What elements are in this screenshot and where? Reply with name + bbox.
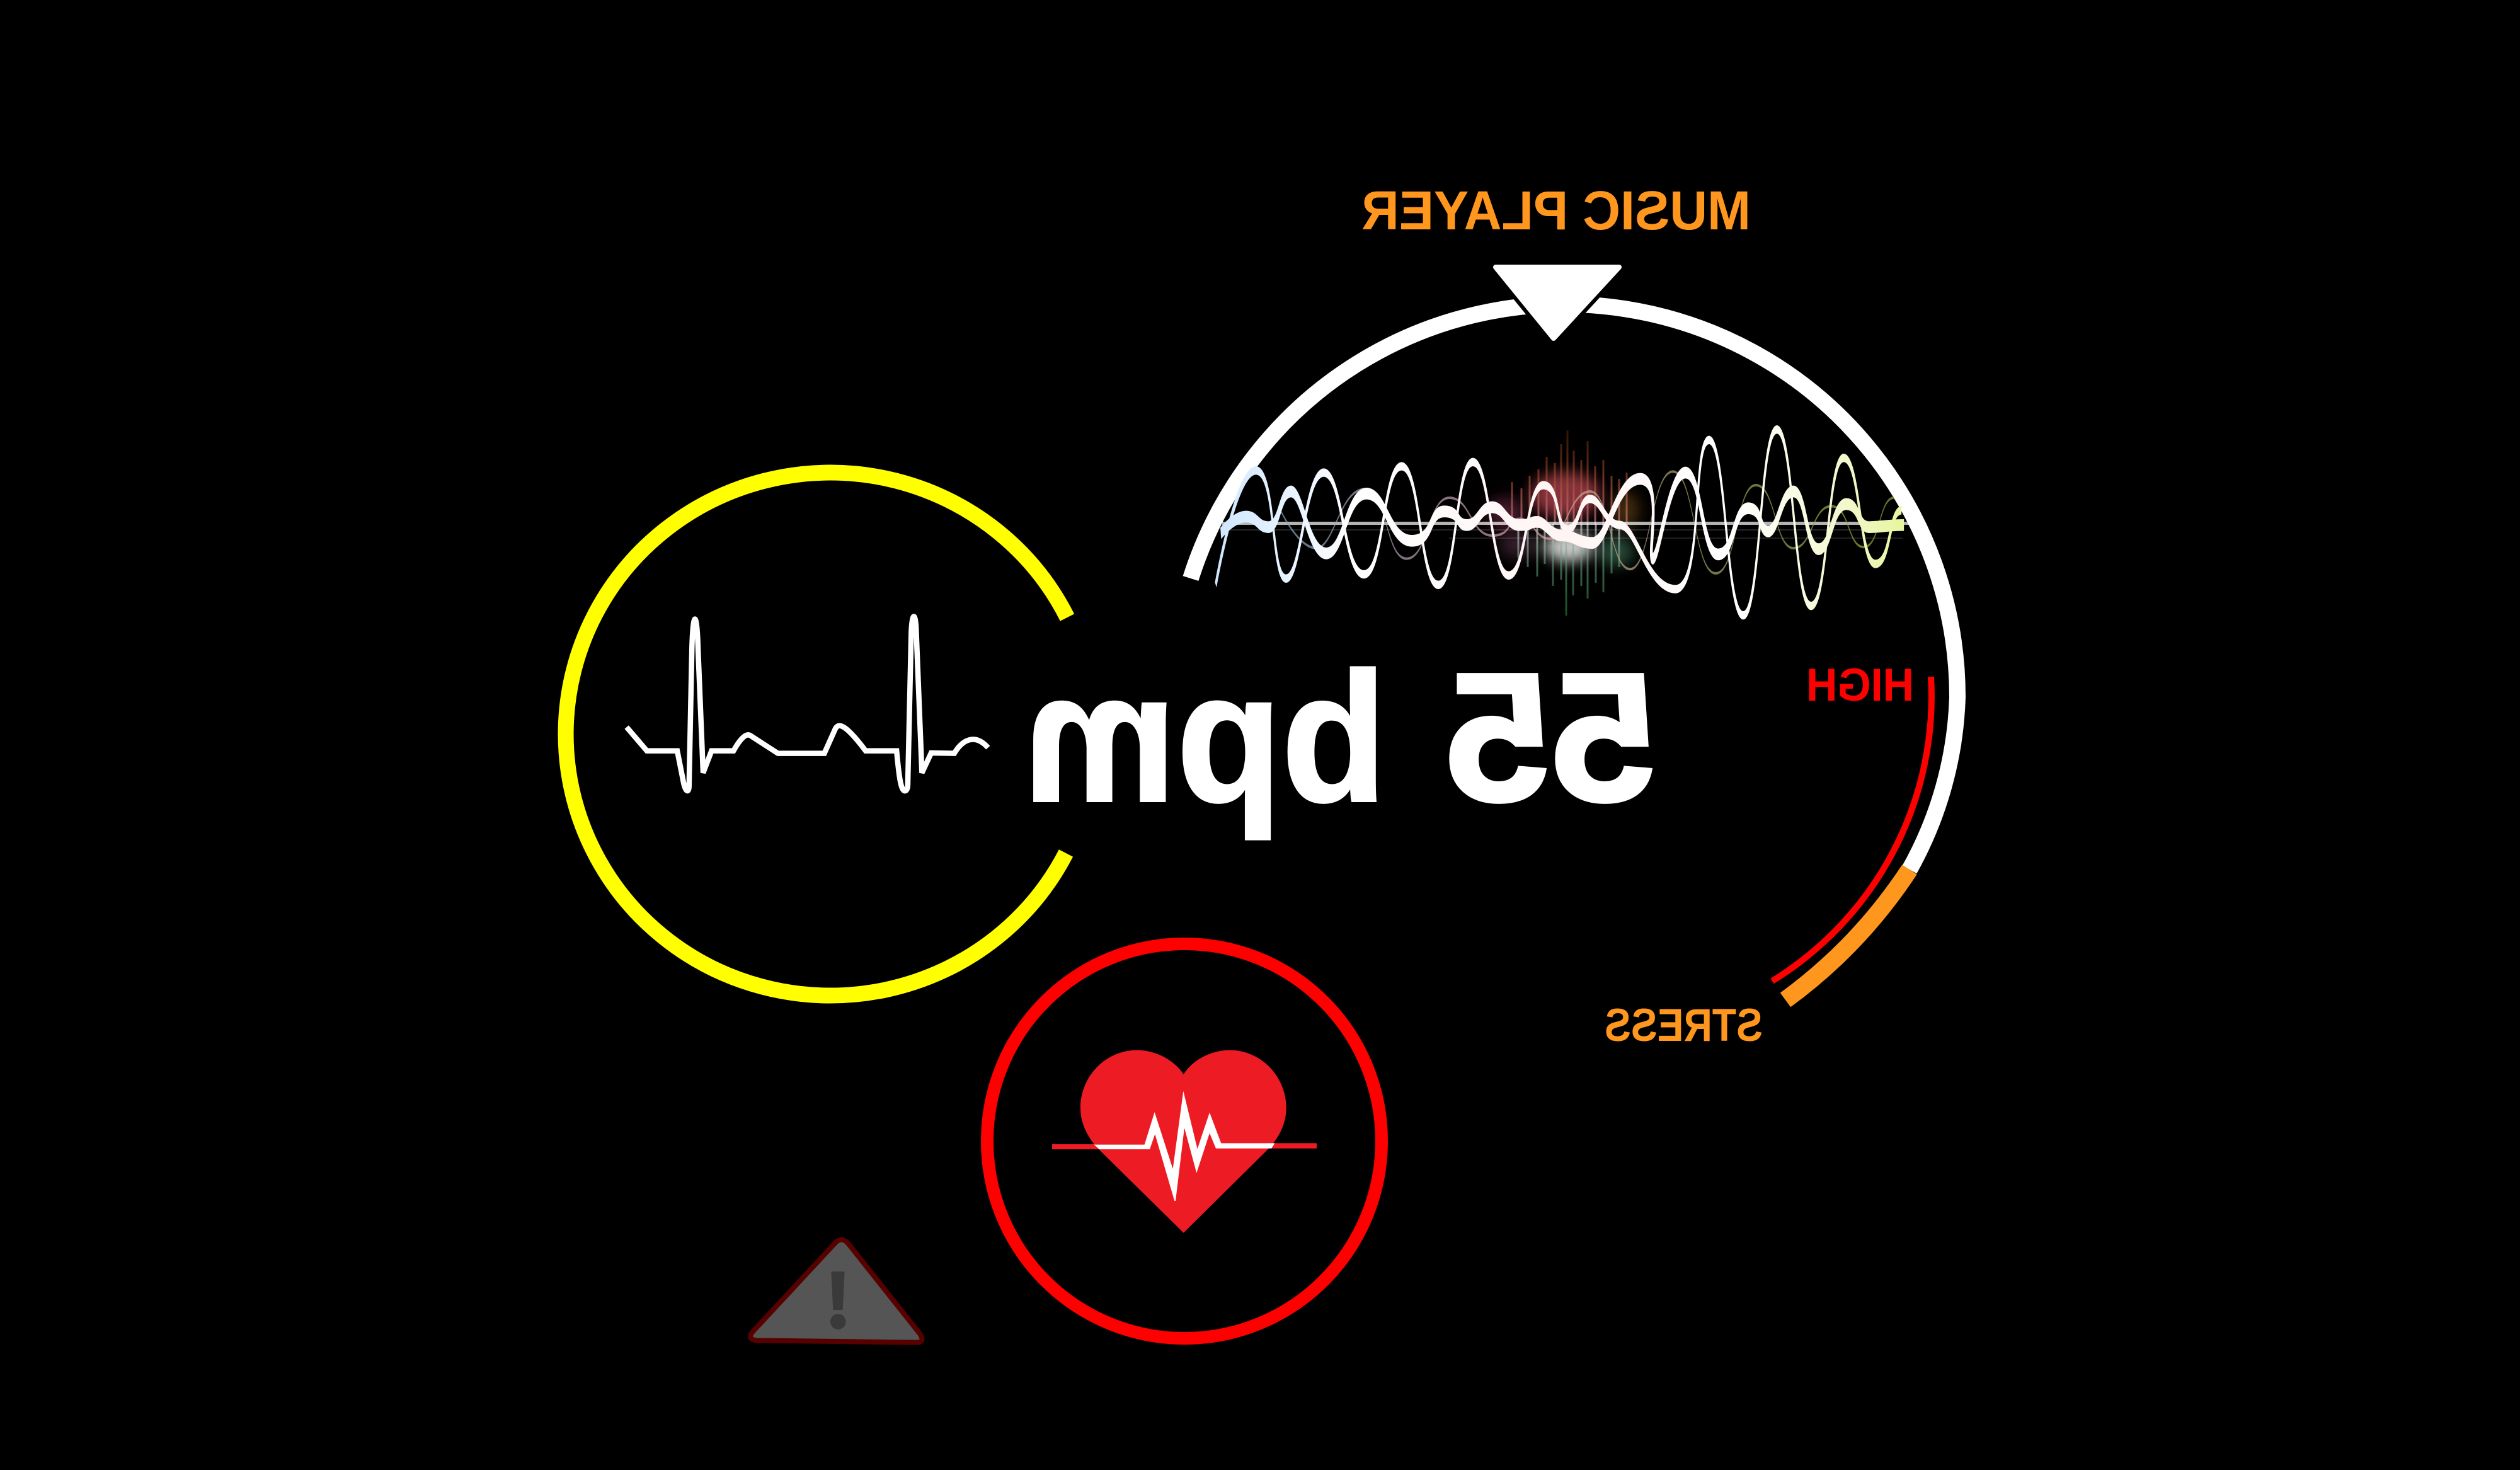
icon: ECG trace bbox=[627, 616, 988, 791]
center lines bbox=[1222, 522, 1909, 539]
big reading: 55 bpm: bpm bbox=[1024, 635, 1387, 841]
label: high: HIGH bbox=[1806, 660, 1914, 711]
spectrum glow bbox=[1487, 472, 1639, 566]
big reading: 55 bpm bbox=[1024, 635, 1657, 841]
orange sliver under ring bbox=[1915, 744, 1961, 866]
waves bbox=[1216, 430, 1904, 616]
spectrum spikes bbox=[1512, 430, 1627, 616]
triangle pointer bbox=[1496, 267, 1619, 338]
label: stress: STRESS bbox=[1605, 1000, 1763, 1051]
icon: warning triangle bbox=[750, 1239, 922, 1343]
title: music player: MUSIC PLAYER bbox=[1361, 180, 1751, 241]
yellow circle gauge bbox=[566, 473, 1067, 996]
big reading: 55 bpm: 55 bbox=[1445, 635, 1657, 840]
red heart circle bbox=[987, 944, 1382, 1338]
white music player ring bbox=[1191, 304, 1957, 870]
sound waveform bbox=[1216, 430, 1909, 616]
red high arc bbox=[1772, 677, 1932, 981]
orange stress arc bbox=[1785, 870, 1910, 1000]
icon: heart with pulse bbox=[1052, 1050, 1317, 1233]
